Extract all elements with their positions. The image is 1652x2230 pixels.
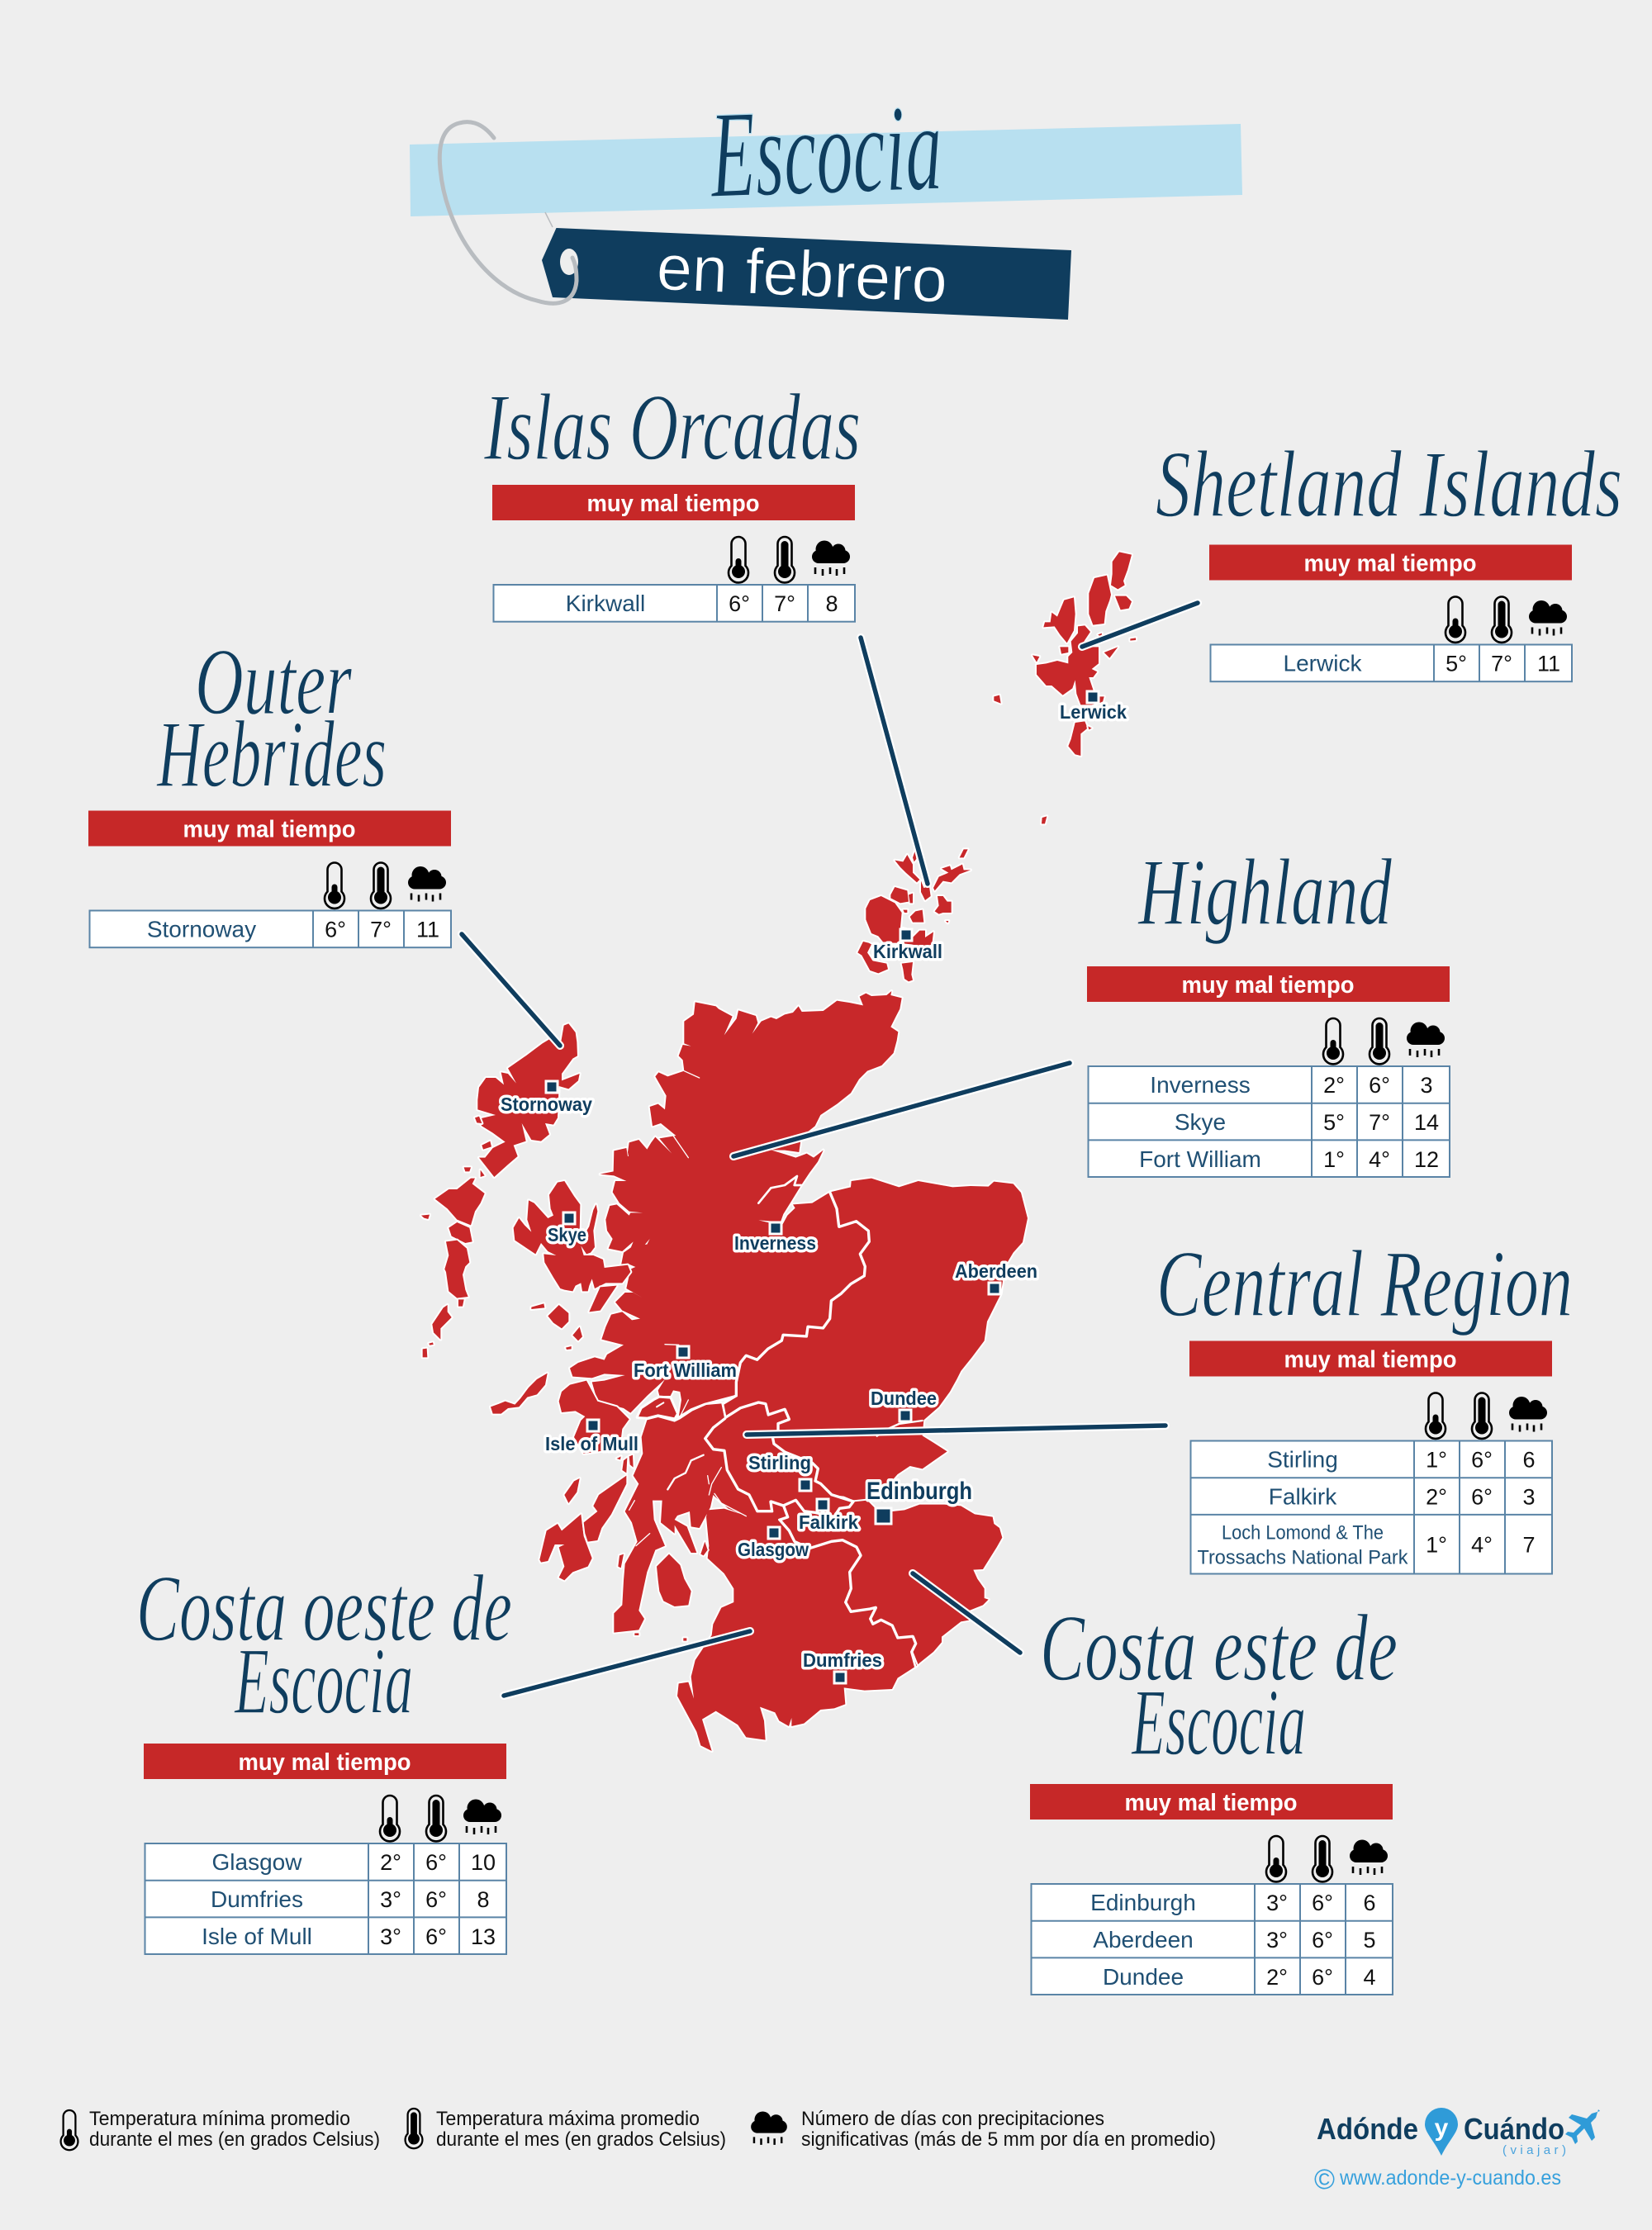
table: 6° xyxy=(425,1924,447,1949)
small Hebridean islands xyxy=(421,1117,491,1357)
island: Gigha xyxy=(618,1554,624,1568)
marker: Aberdeen xyxy=(955,1260,1037,1294)
table: 2° xyxy=(1426,1485,1447,1510)
table: 7° xyxy=(370,917,392,942)
marker: Glasgow: Glasgow xyxy=(738,1539,809,1560)
subtitle tag xyxy=(542,228,1071,320)
panel: Islas Orcadas xyxy=(483,375,861,622)
table: 1° xyxy=(1426,1533,1447,1558)
table: 8 xyxy=(477,1887,490,1912)
panel: Central Region xyxy=(1156,1231,1573,1574)
table: muy mal tiempo xyxy=(586,491,760,517)
Orkney xyxy=(857,849,971,981)
table: Skye xyxy=(1175,1109,1226,1135)
table: 12 xyxy=(1414,1147,1439,1172)
table: 2° xyxy=(1266,1965,1288,1990)
table: 4° xyxy=(1369,1147,1390,1172)
panel: Highland xyxy=(1087,840,1450,1177)
website: www.adonde-y-cuando.es xyxy=(1339,2166,1561,2190)
island: Jura xyxy=(584,1476,626,1542)
region: north-east coast xyxy=(723,1179,1028,1503)
marker: Dundee: Dundee xyxy=(871,1388,937,1409)
table: Edinburgh xyxy=(1090,1890,1196,1915)
table: Loch Lomond & The xyxy=(1222,1521,1384,1544)
marker: Falkirk xyxy=(799,1499,858,1533)
table: 11 xyxy=(1537,651,1560,676)
lochs and firths xyxy=(629,1071,923,1546)
island: Skye xyxy=(514,1181,630,1291)
legend: maximum temperature: durante el mes (en grados Celsius) xyxy=(436,2128,726,2151)
logo text: viajar: ( v i a j a r ) xyxy=(1502,2143,1566,2157)
Shetland xyxy=(994,552,1136,823)
table: Glasgow xyxy=(212,1849,302,1875)
marker: Skye: Skye xyxy=(548,1224,586,1245)
tag string xyxy=(545,212,553,227)
table: Stirling xyxy=(1267,1447,1338,1472)
heading: Islas Orcadas xyxy=(483,375,861,480)
marker: Skye xyxy=(548,1212,586,1245)
table: Dundee xyxy=(1103,1964,1184,1990)
marker: Inverness: Inverness xyxy=(734,1232,816,1254)
table: 6° xyxy=(425,1887,447,1912)
table: 7° xyxy=(1369,1110,1390,1135)
table: Aberdeen xyxy=(1093,1927,1194,1952)
island: Lewis and Harris xyxy=(477,1023,580,1177)
island: Hoy xyxy=(857,942,888,973)
logo text: y: y xyxy=(1435,2114,1449,2142)
region: Central xyxy=(705,1402,853,1517)
panel: Shetland Islands xyxy=(1156,432,1622,681)
icon: map pin xyxy=(1425,2108,1458,2156)
legend: minimum temperature: durante el mes (en grados Celsius) xyxy=(89,2128,380,2151)
table: 3 xyxy=(1420,1073,1433,1098)
table: 6° xyxy=(1369,1073,1390,1098)
table xyxy=(1209,545,1572,681)
table: 2° xyxy=(1323,1073,1345,1098)
marker: Stornoway: Stornoway xyxy=(501,1094,592,1115)
marker: Aberdeen: Aberdeen xyxy=(955,1260,1037,1282)
leader: Costa oeste xyxy=(504,1631,750,1696)
table: Falkirk xyxy=(1269,1483,1337,1510)
leader: Costa este xyxy=(913,1573,1020,1653)
heading: Highland xyxy=(1137,840,1392,945)
region boundaries xyxy=(638,1192,915,1667)
table: Fort William xyxy=(1139,1146,1261,1172)
island: Colonsay xyxy=(564,1478,580,1503)
table: 5° xyxy=(1323,1110,1345,1135)
marker: Stornoway xyxy=(501,1081,592,1115)
island: South Mainland xyxy=(1068,721,1088,756)
table: Trossachs National Park xyxy=(1198,1546,1408,1569)
legend: rainy days: Número de días con precipitaciones xyxy=(801,2108,1104,2130)
map of Scotland xyxy=(421,552,1136,1751)
table: 8 xyxy=(825,591,838,616)
region: Highland xyxy=(570,991,902,1417)
marker: Stirling xyxy=(748,1452,811,1491)
table: 1° xyxy=(1323,1147,1345,1172)
island: Shetland Mainland xyxy=(1037,625,1104,705)
island: Benbecula xyxy=(449,1222,472,1243)
heading line 1: Outer xyxy=(195,629,353,734)
leader: Highland xyxy=(733,1063,1070,1156)
table: 2° xyxy=(380,1850,401,1875)
table: 6° xyxy=(1471,1485,1493,1510)
marker: Kirkwall: Kirkwall xyxy=(873,941,942,962)
Hebrides and Skye xyxy=(421,1023,630,1357)
table: 14 xyxy=(1414,1110,1439,1135)
table: Inverness xyxy=(1150,1072,1251,1098)
city markers and labels xyxy=(501,691,1127,1683)
panel: Costa este de Escocia xyxy=(1030,1596,1398,1995)
island: Yell xyxy=(1089,576,1111,625)
table: muy mal tiempo xyxy=(183,816,355,842)
region: west coast xyxy=(614,1403,917,1751)
panel: Outer Hebrides xyxy=(88,629,451,947)
marker: Dumfries xyxy=(803,1649,882,1683)
island: Unst xyxy=(1111,552,1132,589)
icon: copyright: © xyxy=(1314,2164,1335,2195)
table: muy mal tiempo xyxy=(238,1749,411,1776)
northern and southern Orkney islands xyxy=(890,849,971,981)
table: 7 xyxy=(1522,1533,1536,1558)
panel: Costa oeste de Escocia xyxy=(136,1556,512,1954)
tag hole xyxy=(560,249,578,275)
heading line 2: Escocia xyxy=(1131,1670,1306,1775)
table: 13 xyxy=(471,1924,496,1949)
legend xyxy=(61,2108,1216,2151)
table: muy mal tiempo xyxy=(1125,1790,1297,1816)
table: Kirkwall xyxy=(566,591,645,616)
island: Coll and Tiree xyxy=(491,1374,548,1414)
table: 7° xyxy=(1491,651,1512,676)
marker: Lerwick: Lerwick xyxy=(1060,701,1127,723)
table: Isle of Mull xyxy=(202,1924,312,1949)
island: Sleat xyxy=(589,1286,617,1312)
heading line 1: Costa este de xyxy=(1040,1596,1398,1701)
region: Lorn xyxy=(638,1397,677,1418)
marker: Isle of Mull: Isle of Mull xyxy=(545,1433,638,1454)
marker: Stirling: Stirling xyxy=(748,1452,811,1473)
tag ring xyxy=(439,122,577,303)
table: 6 xyxy=(1522,1447,1536,1472)
legend: rainy days xyxy=(751,2108,1216,2151)
islands: Canna, Rum, Eigg, Muck xyxy=(531,1303,582,1350)
table: Dumfries xyxy=(211,1886,303,1912)
table: 6° xyxy=(1312,1965,1333,1990)
subtitle: en febrero: en febrero xyxy=(655,230,949,316)
legend: minimum temperature xyxy=(61,2108,380,2151)
title block xyxy=(410,78,1242,320)
table: 6° xyxy=(1312,1928,1333,1952)
table: muy mal tiempo xyxy=(1303,550,1477,576)
table xyxy=(1189,1341,1552,1574)
table: 3 xyxy=(1522,1485,1536,1510)
legend: maximum temperature: Temperatura máxima promedio xyxy=(436,2108,700,2130)
table: Lerwick xyxy=(1284,651,1362,676)
table: 5° xyxy=(1446,651,1467,676)
small Shetland islands xyxy=(994,596,1136,823)
table: 11 xyxy=(416,917,439,942)
table: 6° xyxy=(729,591,750,616)
legend: rainy days: significativas (más de 5 mm por día en promedio) xyxy=(801,2128,1216,2151)
table: 6° xyxy=(425,1850,447,1875)
marker: Isle of Mull xyxy=(545,1420,638,1454)
table xyxy=(1030,1784,1393,1995)
leader lines xyxy=(462,603,1198,1696)
logo text: Cuándo: Cuándo xyxy=(1464,2112,1564,2146)
legend: maximum temperature xyxy=(406,2108,726,2151)
table: 6° xyxy=(325,917,346,942)
table: 6° xyxy=(1312,1891,1333,1915)
marker: Kirkwall xyxy=(873,929,942,962)
table: 4 xyxy=(1363,1965,1376,1990)
heading line 2: Escocia xyxy=(234,1629,413,1734)
leader: Islas Orcadas xyxy=(861,638,928,884)
table: 7° xyxy=(774,591,795,616)
marker: Lerwick xyxy=(1060,691,1127,723)
logo: Adónde y Cuándo xyxy=(1314,2108,1600,2195)
island: South Uist xyxy=(444,1241,469,1298)
marker: Dumfries: Dumfries xyxy=(803,1649,882,1671)
title band xyxy=(410,124,1242,216)
marker: Inverness xyxy=(734,1222,816,1254)
title: Escocia: Escocia xyxy=(707,78,944,224)
marker: Falkirk: Falkirk xyxy=(799,1511,858,1533)
table: 6 xyxy=(1363,1891,1376,1915)
table: muy mal tiempo xyxy=(1181,972,1355,999)
table xyxy=(1087,966,1450,1177)
island: North Uist xyxy=(435,1179,485,1225)
table: 3° xyxy=(1266,1891,1288,1915)
table xyxy=(88,811,451,947)
leader: Shetland Islands xyxy=(1082,603,1198,647)
table: 3° xyxy=(380,1924,401,1949)
table: 6° xyxy=(1471,1447,1493,1472)
small islands south-west xyxy=(617,1455,708,1641)
marker: Edinburgh xyxy=(866,1478,972,1524)
heading line 2: Hebrides xyxy=(156,702,387,807)
table: 10 xyxy=(471,1850,496,1875)
island: Mull xyxy=(559,1381,629,1454)
marker: Fort William: Fort William xyxy=(634,1359,737,1381)
logo text: Adónde: Adónde xyxy=(1317,2112,1418,2146)
marker: Dundee xyxy=(871,1388,937,1421)
island: Barra xyxy=(432,1305,452,1340)
table xyxy=(144,1744,506,1954)
leader: Central Region xyxy=(747,1426,1165,1435)
table: 3° xyxy=(1266,1928,1288,1952)
island: Islay xyxy=(539,1514,592,1580)
table xyxy=(492,485,855,622)
table: muy mal tiempo xyxy=(1284,1346,1457,1373)
table: 3° xyxy=(380,1887,401,1912)
island: Orkney Mainland xyxy=(866,896,933,947)
mainland regions xyxy=(491,991,1028,1751)
marker: Glasgow xyxy=(738,1527,809,1560)
table: 5 xyxy=(1363,1928,1376,1952)
icon: plane xyxy=(1565,2109,1600,2144)
table: 4° xyxy=(1471,1533,1493,1558)
marker: Edinburgh: Edinburgh xyxy=(866,1478,972,1505)
marker: Fort William xyxy=(634,1346,737,1381)
region: Edinburgh and Borders xyxy=(779,1501,1002,1667)
table: Stornoway xyxy=(147,917,256,942)
legend: minimum temperature: Temperatura mínima promedio xyxy=(89,2108,350,2130)
leader: Outer Hebrides xyxy=(462,934,560,1046)
table: 1° xyxy=(1426,1447,1447,1472)
island: Northmavine xyxy=(1043,597,1075,643)
island: Arran xyxy=(657,1554,691,1606)
heading line 1: Costa oeste de xyxy=(136,1556,512,1661)
